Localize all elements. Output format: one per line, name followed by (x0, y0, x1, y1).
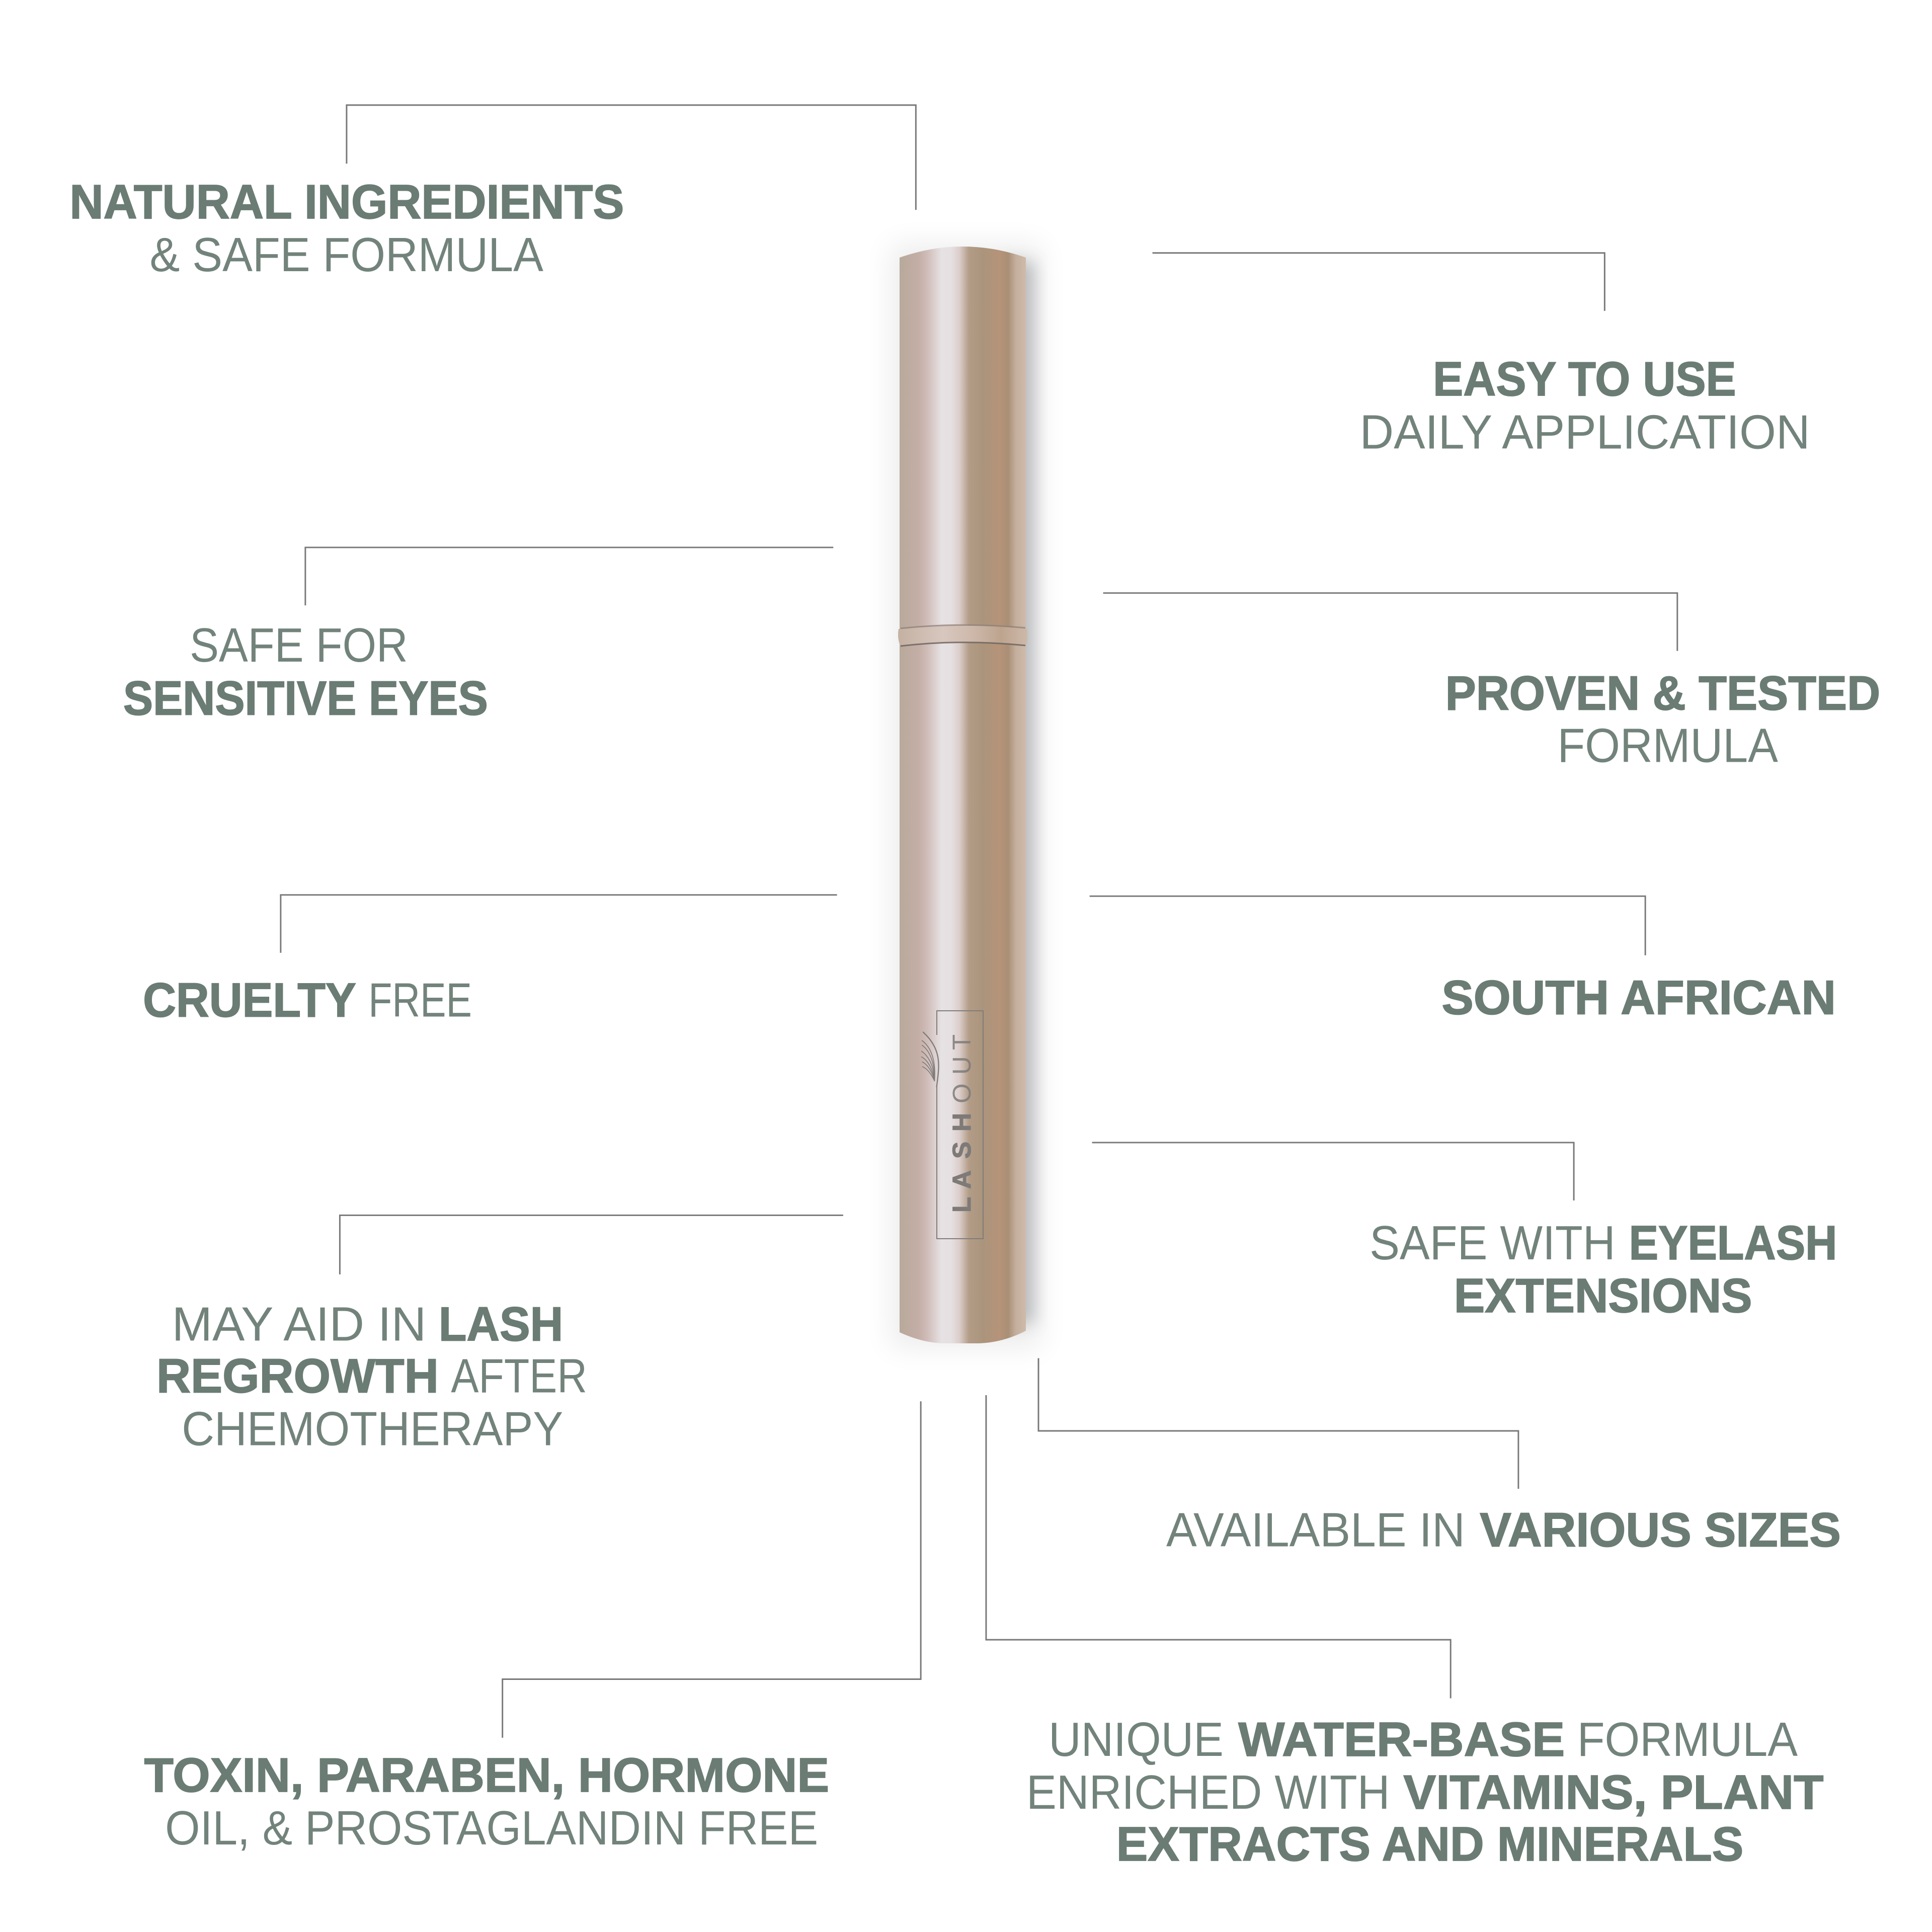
text: natural ingredients (69, 176, 624, 282)
text: cruelty free: FREE (368, 974, 472, 1027)
text: easy to use (1359, 353, 1810, 459)
callout: cruelty free (143, 895, 837, 1027)
text: toxin free: TOXIN, PARABEN, HORMONE (144, 1749, 829, 1802)
callout: water-base formula (986, 1395, 1824, 1871)
text: proven and tested: PROVEN & TESTED (1445, 667, 1880, 720)
cap collar band (898, 625, 1027, 646)
text: south african: SOUTH AFRICAN (1441, 972, 1836, 1025)
text: easy to use: DAILY APPLICATION (1359, 406, 1810, 459)
logo lash icon (922, 1032, 939, 1087)
text: toxin free: OIL, & PROSTAGLANDIN FREE (165, 1802, 818, 1855)
text: eyelash extensions: EXTENSIONS (1454, 1269, 1752, 1323)
text: cruelty free: CRUELTY (143, 974, 356, 1027)
product: lash serum tube (891, 244, 1041, 1348)
logo wordmark: OUT (947, 1034, 976, 1103)
callout: lash regrowth (156, 1215, 843, 1456)
text: water-base formula: UNIQUE (1049, 1713, 1224, 1766)
callout: various sizes (1038, 1358, 1841, 1557)
text: natural ingredients: & SAFE FORMULA (150, 228, 543, 282)
text: eyelash extensions: EYELASH (1629, 1217, 1837, 1270)
callout: south african (1090, 896, 1836, 1025)
text: water-base formula: ENRICHED WITH (1026, 1766, 1390, 1819)
connector (1038, 1358, 1518, 1489)
connector (1090, 896, 1645, 955)
text: water-base formula: FORMULA (1577, 1713, 1798, 1766)
text: toxin free (144, 1749, 829, 1855)
connector (347, 105, 916, 210)
text: water-base formula: WATER-BASE (1238, 1713, 1565, 1766)
text: water-base formula: VITAMINS, PLANT (1403, 1766, 1824, 1819)
text: lash regrowth: AFTER (451, 1349, 587, 1403)
connector (1153, 253, 1604, 311)
text: eyelash extensions: SAFE WITH (1370, 1217, 1616, 1270)
text: proven and tested: FORMULA (1558, 719, 1778, 773)
connector (305, 547, 833, 605)
text: various sizes (1166, 1503, 1841, 1557)
logo frame (937, 1011, 983, 1239)
text: cruelty free (143, 974, 472, 1027)
text: sensitive eyes: SAFE FOR (190, 619, 408, 672)
callout: toxin free (144, 1401, 921, 1855)
text: lash regrowth: REGROWTH (156, 1349, 439, 1403)
connector (281, 895, 837, 953)
text: easy to use: EASY TO USE (1433, 353, 1736, 406)
text: sensitive eyes: SENSITIVE EYES (123, 672, 488, 725)
text: sensitive eyes (123, 619, 488, 725)
callout: easy to use (1153, 253, 1810, 459)
callout: natural ingredients (69, 105, 916, 282)
connector (503, 1401, 921, 1738)
text: lash regrowth (156, 1298, 587, 1456)
callout: proven and tested (1103, 593, 1880, 773)
text: lash regrowth: MAY AID IN (172, 1298, 426, 1351)
text: water-base formula (1026, 1713, 1824, 1871)
text: proven and tested (1445, 667, 1880, 773)
text: lash regrowth: CHEMOTHERAPY (182, 1403, 563, 1456)
connector (986, 1395, 1451, 1698)
connector (340, 1215, 843, 1274)
logo: LASHOUT (922, 1011, 983, 1239)
text: eyelash extensions (1370, 1217, 1837, 1323)
text: lash regrowth: LASH (439, 1298, 563, 1351)
callout: eyelash extensions (1092, 1143, 1837, 1323)
text: various sizes: VARIOUS SIZES (1480, 1503, 1841, 1557)
text: various sizes: AVAILABLE IN (1166, 1503, 1465, 1557)
logo wordmark: LASH (947, 1113, 976, 1213)
tube body (900, 247, 1026, 1343)
connector (1092, 1143, 1574, 1200)
text: water-base formula: EXTRACTS AND MINERALS (1116, 1818, 1743, 1871)
connector (1103, 593, 1677, 651)
text: natural ingredients: NATURAL INGREDIENTS (69, 176, 624, 229)
tube shadow (891, 244, 1041, 1348)
callout: sensitive eyes (123, 547, 833, 725)
